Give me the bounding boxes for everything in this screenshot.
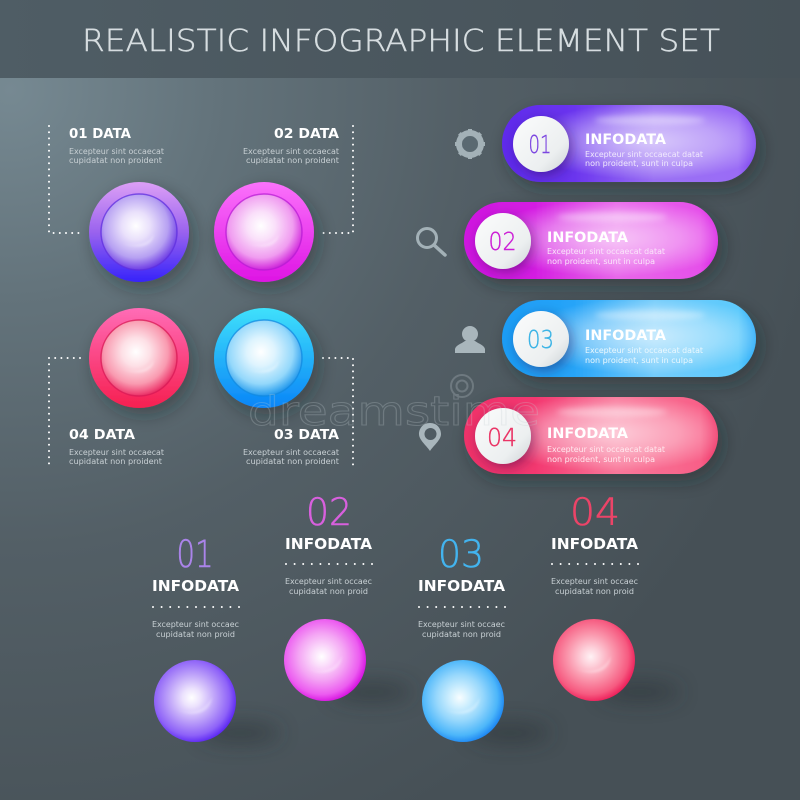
item: 01 data text: cupidatat non proident	[69, 155, 163, 165]
pill text 03: Excepteur sint occaecat datat	[585, 345, 704, 355]
button: 03 blue	[214, 308, 314, 408]
title: REALISTIC INFOGRAPHIC ELEMENT SET	[82, 24, 720, 59]
heading 03: INFODATA	[418, 577, 505, 595]
pill: 04 infodata	[464, 397, 718, 474]
item: 03 data text: 03 DATA	[274, 427, 340, 443]
column: 01 sphere	[152, 533, 280, 743]
pill: 03 infodata	[502, 300, 756, 377]
description 03: cupidatat non proid	[422, 629, 501, 639]
column: 03 sphere	[418, 533, 550, 743]
description 01	[152, 619, 239, 639]
number disc 02: 02	[488, 227, 516, 256]
sphere 03	[422, 660, 504, 742]
pill text 01: Excepteur sint occaecat datat	[585, 149, 704, 159]
icon: person	[455, 326, 485, 353]
number disc 04: 04	[487, 423, 517, 452]
pill text 01	[585, 132, 704, 168]
description 03	[418, 619, 505, 639]
number 03: 03	[438, 533, 484, 576]
pill: 02 infodata	[464, 202, 718, 279]
column: 02 sphere	[284, 491, 412, 702]
description 03: Excepteur sint occaec	[418, 619, 505, 629]
number disc 04	[475, 408, 531, 464]
number 04: 04	[570, 491, 620, 534]
description 01: Excepteur sint occaec	[152, 619, 239, 629]
item: 04 data text	[69, 427, 165, 466]
description 04: cupidatat non proid	[555, 586, 634, 596]
pill text 02: non proident, sunt in culpa	[547, 256, 655, 266]
heading 02: INFODATA	[285, 535, 372, 553]
number disc 01	[513, 116, 569, 172]
item: 02 data text: Excepteur sint occaecat	[243, 146, 340, 156]
description 02: Excepteur sint occaec	[285, 576, 372, 586]
pill text 04: Excepteur sint occaecat datat	[547, 444, 666, 454]
item: 02 data text	[243, 126, 340, 165]
pill text 04	[547, 426, 666, 464]
sphere 01	[154, 660, 236, 742]
number disc 03: 03	[527, 325, 554, 354]
watermark	[248, 375, 540, 435]
number disc 02	[475, 213, 531, 269]
pill text 03: non proident, sunt in culpa	[585, 355, 693, 365]
icon: map pin	[419, 423, 441, 451]
number 02: 02	[306, 491, 352, 534]
item: 02 data text: cupidatat non proident	[246, 155, 340, 165]
sphere 02	[284, 619, 366, 701]
description 04	[551, 576, 638, 596]
item: 01 data text	[69, 126, 165, 165]
watermark: dreamstime	[248, 389, 540, 435]
button: 01 purple	[89, 182, 189, 282]
heading 01: INFODATA	[152, 577, 239, 595]
item: 03 data text: cupidatat non proident	[246, 456, 340, 466]
pill text 02: Excepteur sint occaecat datat	[547, 246, 666, 256]
header band	[0, 0, 800, 78]
heading 04: INFODATA	[551, 535, 638, 553]
description 02	[285, 576, 372, 596]
item: 03 data text	[243, 427, 340, 466]
pill text 01: non proident, sunt in culpa	[585, 158, 693, 168]
column: 04 sphere	[551, 491, 680, 702]
description 04: Excepteur sint occaec	[551, 576, 638, 586]
item: 03 data text: Excepteur sint occaecat	[243, 447, 340, 457]
item: 04 data text: 04 DATA	[69, 427, 136, 443]
pill text 01: INFODATA	[585, 132, 667, 148]
pill text 04: non proident, sunt in culpa	[547, 454, 655, 464]
icon: magnifier	[418, 228, 445, 255]
item: 01 data text: 01 DATA	[69, 126, 132, 142]
description 02: cupidatat non proid	[289, 586, 368, 596]
sphere 04	[553, 619, 635, 701]
number disc 03	[513, 311, 569, 367]
pill text 02	[547, 230, 666, 266]
pill: 01 infodata	[502, 105, 756, 182]
button: 04 pink	[89, 308, 189, 408]
number disc 01: 01	[528, 130, 552, 159]
pill text 02: INFODATA	[547, 230, 629, 246]
button: 02 magenta	[214, 182, 314, 282]
item: 04 data text: Excepteur sint occaecat	[69, 447, 165, 457]
panel: data circles	[49, 126, 353, 467]
number 01: 01	[176, 533, 214, 576]
item: 01 data text: Excepteur sint occaecat	[69, 146, 165, 156]
pill text 03	[585, 328, 704, 365]
item: 04 data text: cupidatat non proident	[69, 456, 163, 466]
icon: gear	[455, 129, 485, 159]
pill text 04: INFODATA	[547, 426, 629, 442]
item: 02 data text: 02 DATA	[274, 126, 340, 142]
description 01: cupidatat non proid	[156, 629, 235, 639]
pill text 03: INFODATA	[585, 328, 667, 344]
